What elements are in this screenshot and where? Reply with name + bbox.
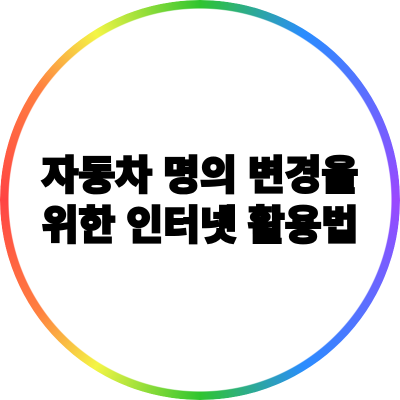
title line 1: 자동차 명의 변경을 xyxy=(42,154,358,198)
title line 2: 위한 인터넷 활용법 xyxy=(42,204,358,248)
